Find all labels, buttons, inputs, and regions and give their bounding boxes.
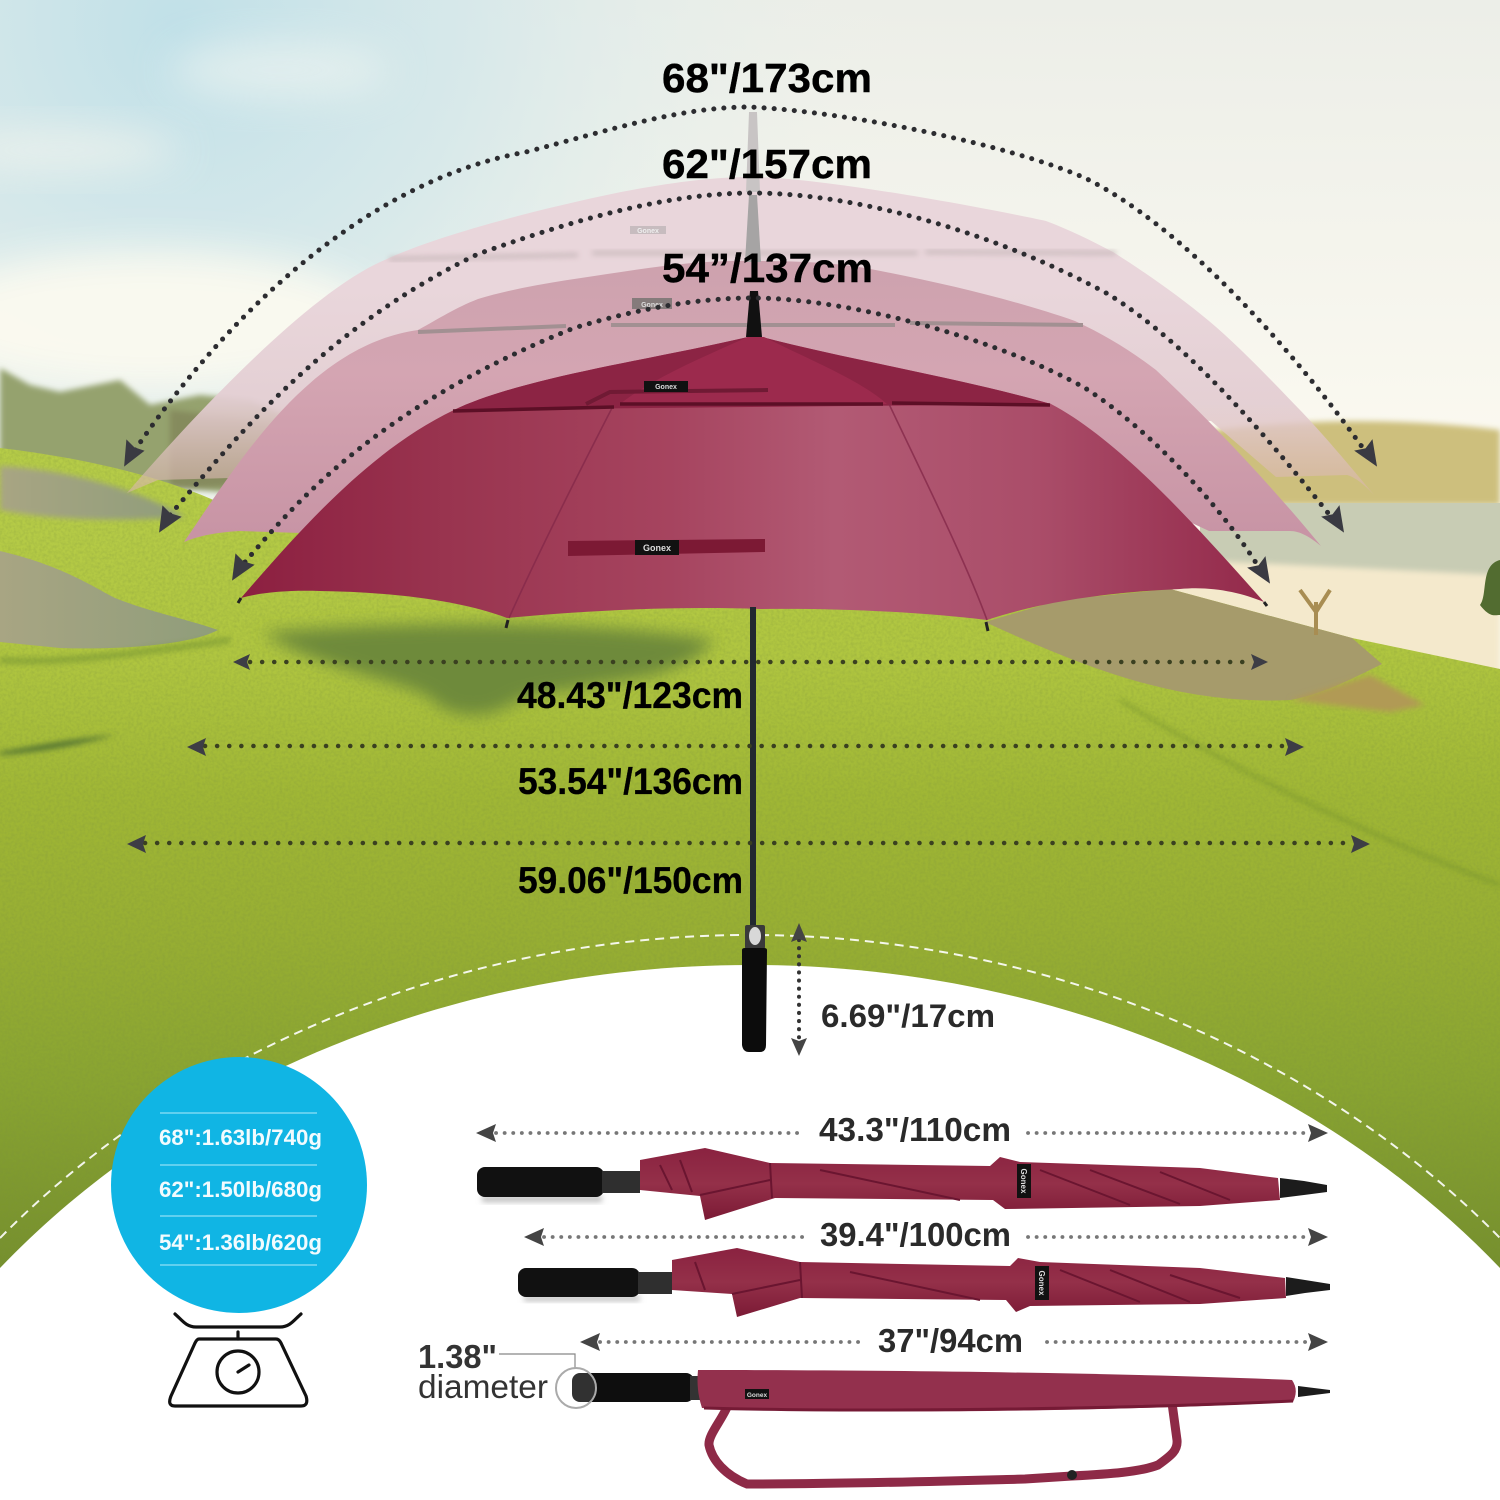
folded umbrella with cover and strap: Gonex [747,1392,767,1399]
horizontal span arrow: 53.54 inch [187,738,1304,756]
folded umbrella: 68 inch [477,1148,1327,1220]
dotted arc: 54 inch span [233,298,1269,582]
folded umbrella with cover and strap [572,1370,1330,1484]
length arrow: 39.4 inch [524,1228,1328,1246]
umbrella silhouette: 62 inch: Gonex [641,302,663,309]
label: 48.43 inch: 48.43"/123cm [517,675,743,716]
horizontal span arrow: 48.43 inch [233,654,1268,670]
length arrow: 43.3 inch [476,1124,1328,1142]
handle length arrow [791,923,807,1056]
heading: 54 inch diameter: 54”/137cm [662,245,873,291]
label: 39.4 inch: 39.4"/100cm [820,1216,1011,1253]
weight circle: 68":1.63lb/740g [159,1125,322,1150]
main umbrella canopy [238,291,1267,631]
callout: handle diameter [418,1338,596,1408]
length arrow: 37 inch [580,1333,1328,1351]
callout: handle diameter: diameter [418,1368,548,1405]
heading: 68 inch diameter: 68"/173cm [662,55,872,101]
dashed arc above the base panel [0,935,1500,1238]
label: handle length: 6.69"/17cm [821,998,995,1034]
dotted arc: 68 inch span [125,107,1376,465]
icon: kitchen scale [170,1314,307,1406]
label: 59.06 inch: 59.06"/150cm [518,860,743,901]
umbrella silhouette: 68 inch [127,112,1376,497]
heading: 62 inch diameter: 62"/157cm [662,141,872,187]
weight circle: 54":1.36lb/620g [159,1230,322,1255]
umbrella silhouette: 68 inch: Gonex [637,228,659,235]
umbrella silhouette: 62 inch [184,195,1321,546]
dotted arc: 62 inch span [160,193,1343,531]
label: 37 inch: 37"/94cm [878,1322,1023,1359]
main umbrella canopy: Gonex [655,384,677,391]
umbrella shaft and handle [742,607,767,1052]
weight circle: 62":1.50lb/680g [159,1177,322,1202]
label: 53.54 inch: 53.54"/136cm [518,761,743,802]
callout: handle diameter: 1.38" [418,1338,497,1375]
folded umbrella: 62 inch: Gonex [1037,1271,1046,1296]
horizontal span arrow: 59.06 inch [127,835,1370,853]
main umbrella canopy: Gonex [643,543,671,553]
folded umbrella: 68 inch: Gonex [1019,1169,1028,1194]
white curved base panel [0,965,1500,1500]
weight circle [111,1057,367,1313]
folded umbrella: 62 inch [518,1248,1330,1317]
label: 43.3 inch: 43.3"/110cm [819,1111,1011,1148]
